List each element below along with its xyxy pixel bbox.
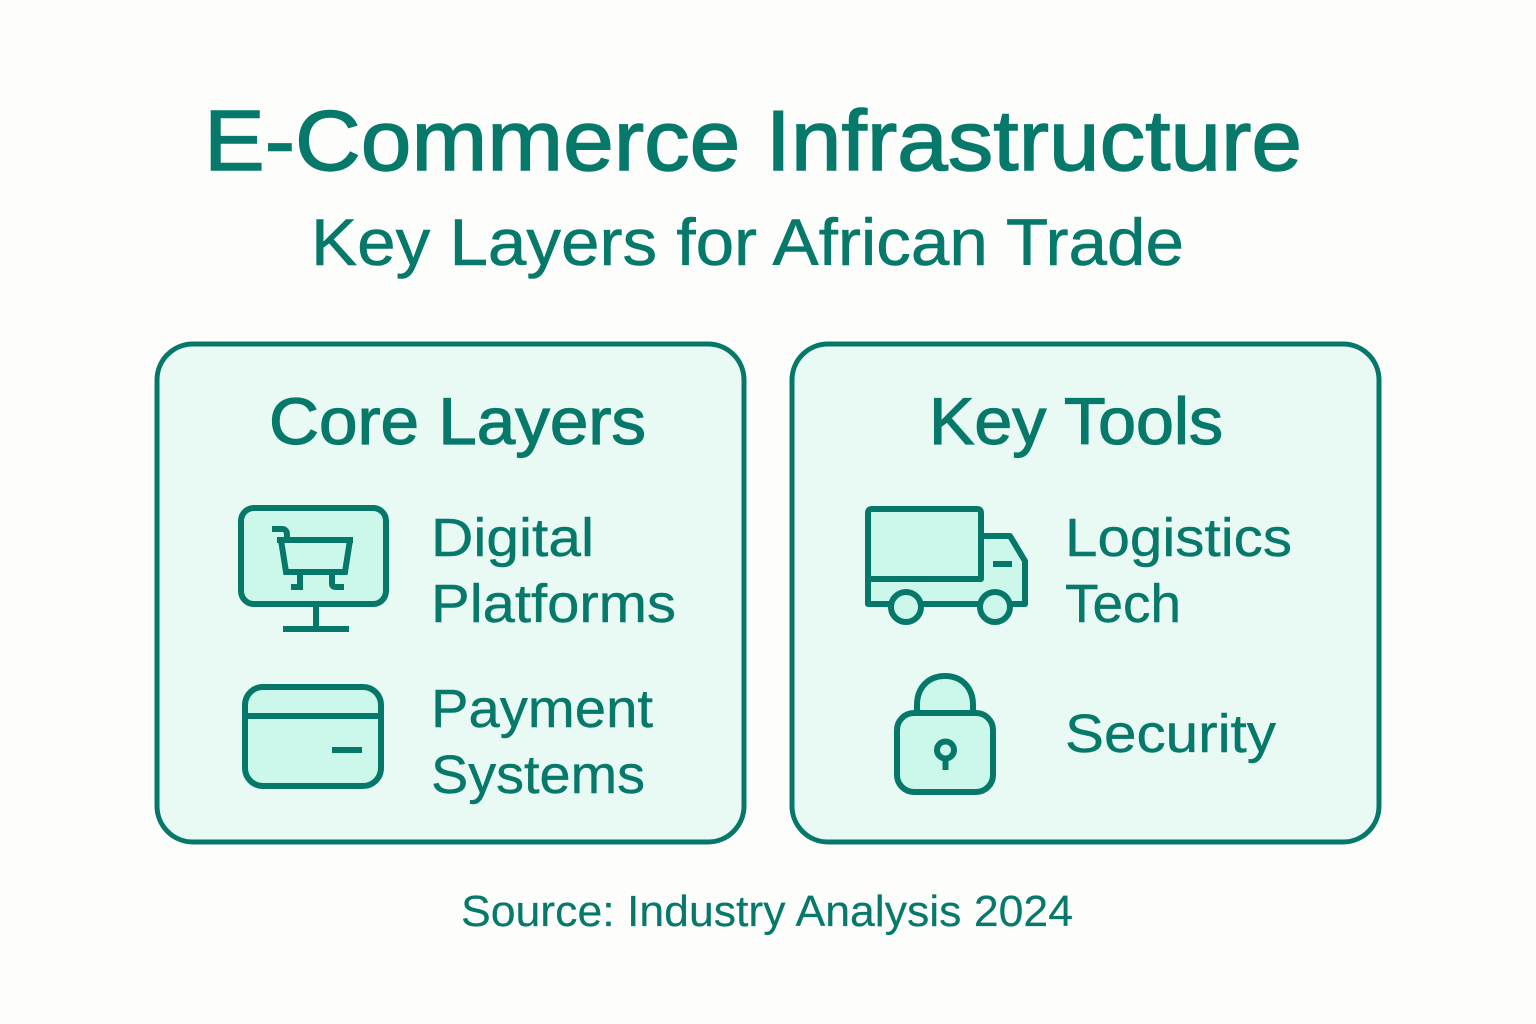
label: digital platforms: Digital [431, 508, 594, 568]
icon: monitor with shopping cart [241, 508, 386, 629]
panel: core layers [157, 344, 744, 842]
heading: core layers: Core Layers [269, 384, 646, 458]
icon: padlock [897, 676, 993, 792]
title: E-Commerce Infrastructure [204, 94, 1302, 189]
label: payment systems: Payment [431, 679, 653, 739]
label: digital platforms: Platforms [431, 574, 676, 634]
label: payment systems: Systems [431, 745, 645, 805]
panel: key tools [792, 344, 1379, 842]
label: payment systems [431, 679, 653, 805]
label: security: Security [1065, 704, 1276, 764]
source note: Source: Industry Analysis 2024 [461, 887, 1073, 936]
label: logistics tech [1065, 508, 1292, 634]
label: digital platforms [431, 508, 676, 634]
label: logistics tech: Logistics [1065, 508, 1292, 568]
icon: delivery truck [868, 509, 1025, 622]
subtitle: Key Layers for African Trade [311, 205, 1184, 279]
heading: key tools: Key Tools [929, 384, 1223, 458]
label: logistics tech: Tech [1065, 574, 1181, 634]
icon: payment card [245, 687, 381, 786]
